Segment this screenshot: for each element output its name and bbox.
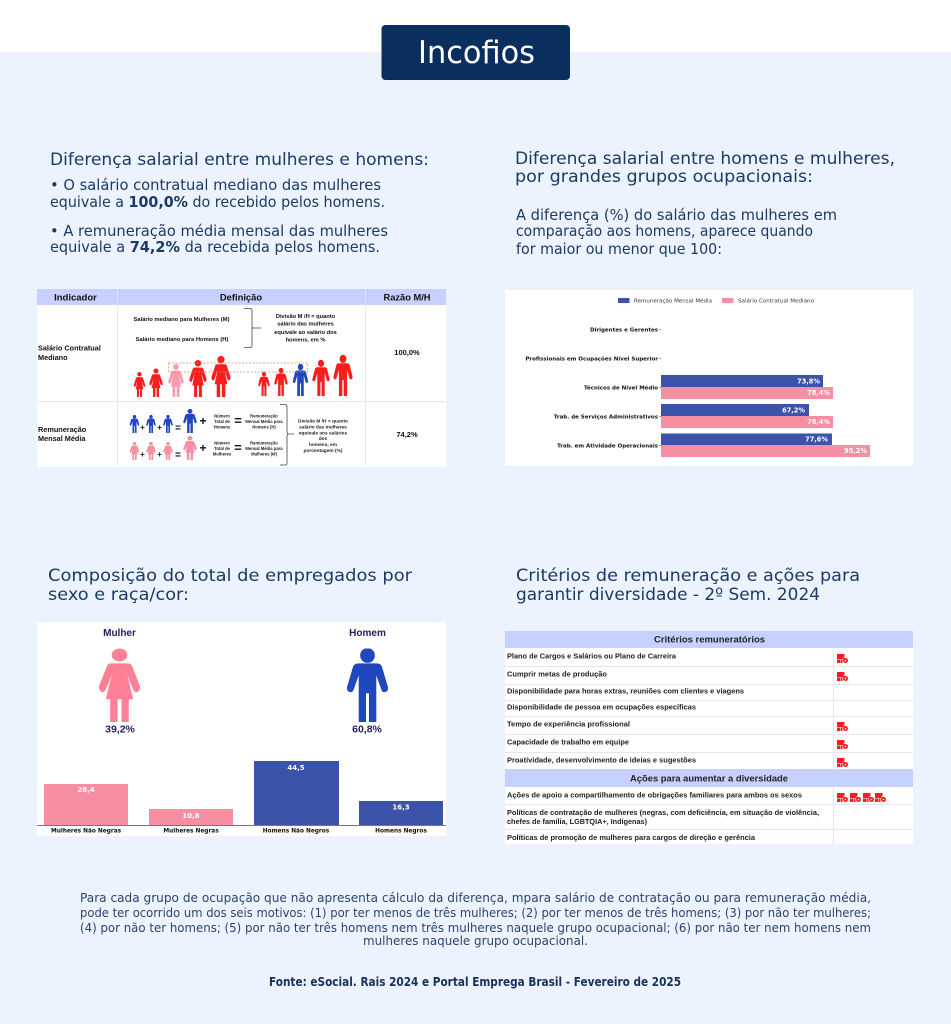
panel: employee composition xyxy=(37,622,446,836)
panel: indicator definition table: = xyxy=(234,413,242,428)
text block: salary difference summary xyxy=(50,150,429,256)
panel: bar chart by occupational group: Profissionais em Ocupações Nível Superior xyxy=(525,356,658,362)
panel: indicator definition table: Mulheres xyxy=(213,452,232,456)
panel: criteria table xyxy=(505,631,913,844)
panel: indicator definition table: Indicador xyxy=(54,292,97,304)
panel: criteria table: Cumprir metas de produção xyxy=(507,670,607,678)
panel: bar chart by occupational group: 73,8% xyxy=(797,378,820,386)
panel: indicator definition table: Mensal Média para xyxy=(245,446,283,451)
bar chart: race and sex: 28,4 xyxy=(77,786,95,794)
title badge xyxy=(382,25,570,80)
panel: indicator definition table: Razão M/H xyxy=(383,292,431,302)
text block: occupational groups heading: for maior ou menor que 100: xyxy=(516,240,722,258)
panel: bar chart by occupational group: 77,6% xyxy=(805,436,828,444)
text block: salary difference summary: equivale a 74,2% da recebida pelos homens. xyxy=(50,238,380,256)
panel: bar chart by occupational group: 78,4% xyxy=(807,389,830,397)
panel: indicator definition table: = xyxy=(175,423,181,434)
panel: indicator definition table: = xyxy=(234,440,242,455)
panel: indicator definition table: + xyxy=(157,450,162,459)
footnote: (4) por não ter homens; (5) por não ter três homens nem três mulheres naquele grupo ocupacional; (6) por não ter nem homens nem xyxy=(80,921,871,935)
panel: indicator definition table: Mensal Média xyxy=(38,434,86,443)
panel: indicator definition table: Remuneração xyxy=(250,414,278,418)
panel: criteria table: Proatividade, desenvolvimento de ideias e sugestões xyxy=(507,756,696,764)
chart legend xyxy=(618,298,815,304)
heading: composition by sex and race: sexo e raça/cor: xyxy=(48,585,189,605)
heading: composition by sex and race xyxy=(48,566,412,605)
panel: indicator definition table xyxy=(37,289,446,467)
panel: indicator definition table: Remuneração xyxy=(250,440,278,446)
panel: indicator definition table: Remuneração xyxy=(38,425,87,434)
footnote: Para cada grupo de ocupação que não apresenta cálculo da diferença, mpara salário de contratação ou para remuneração média, xyxy=(80,891,871,905)
panel: indicator definition table: Divisão M /H = quanto xyxy=(276,314,336,320)
panel: bar chart by occupational group: 78,4% xyxy=(807,418,830,426)
icons: men row xyxy=(258,355,353,396)
panel: indicator definition table: = xyxy=(175,450,181,461)
panel: bar chart by occupational group: Trab. de Serviços Administrativos xyxy=(554,414,659,420)
panel: indicator definition table: porcentagem (%) xyxy=(304,448,343,454)
panel: indicator definition table: salário das mulheres xyxy=(299,424,347,430)
panel: indicator definition table: Homens (H) xyxy=(252,424,276,430)
panel: indicator definition table: Definição xyxy=(220,292,262,302)
panel: employee composition: Homem xyxy=(349,628,386,639)
panel: bar chart by occupational group: 95,2% xyxy=(844,447,867,455)
icons: red markers xyxy=(837,654,886,802)
footnote: pode ter ocorrido um dos seis motivos: (1) por ter menos de três mulheres; (2) por ter menos de três homens; (3) por não ter mulheres; xyxy=(80,906,871,920)
panel: indicator definition table: + xyxy=(199,414,207,428)
panel: criteria table: Ações de apoio a compartilhamento de obrigações familiares para ambos os sexos xyxy=(507,790,802,800)
panel: criteria table: Capacidade de trabalho em equipe xyxy=(507,738,629,746)
text block: salary difference summary: Diferença salarial entre mulheres e homens: xyxy=(50,150,429,170)
panel: indicator definition table: Total de xyxy=(214,419,231,424)
panel: indicator definition table: + xyxy=(157,423,162,432)
text block: occupational groups heading: A diferença (%) do salário das mulheres em xyxy=(516,206,837,224)
panel: indicator definition table: Mulheres (M) xyxy=(251,452,278,456)
text block: occupational groups heading: comparação aos homens, aparece quando xyxy=(516,222,813,240)
panel: bar chart by occupational group: Trab. em Atividade Operacionais xyxy=(557,444,659,450)
bar chart: race and sex: Mulheres Negras xyxy=(163,828,219,834)
panel: indicator definition table: Salário Contratual xyxy=(38,344,101,352)
text block: salary difference summary: • A remuneração média mensal das mulheres xyxy=(50,222,388,240)
heading: pay criteria and diversity actions: garantir diversidade - 2º Sem. 2024 xyxy=(516,585,820,605)
panel: indicator definition table: Mensal Média para xyxy=(245,419,283,424)
heading: pay criteria and diversity actions xyxy=(516,566,860,605)
text block: salary difference summary: equivale a 100,0% do recebido pelos homens. xyxy=(50,193,385,211)
panel: indicator definition table: equivale ao salário dos xyxy=(274,330,337,336)
bar chart: race and sex: 16,3 xyxy=(392,804,410,812)
panel: bar chart by occupational group: Dirigentes e Gerentes xyxy=(590,328,659,334)
panel: indicator definition table: Mediano xyxy=(38,353,68,362)
panel: indicator definition table: homens, em % xyxy=(286,338,325,344)
panel: indicator definition table: Salário mediano para Homens (H) xyxy=(136,337,228,343)
panel: indicator definition table: Número xyxy=(214,440,230,446)
bar chart: race and sex: 44,5 xyxy=(287,764,305,772)
panel: criteria table: Tempo de experiência profissional xyxy=(507,720,630,728)
icon: woman xyxy=(99,648,140,722)
footnote xyxy=(80,891,871,948)
panel: indicator definition table: homens, em xyxy=(309,442,337,448)
panel: criteria table: Critérios remuneratórios xyxy=(654,634,765,644)
icon: man xyxy=(347,648,388,722)
panel: indicator definition table: 100,0% xyxy=(394,348,420,357)
bar chart: race and sex: Mulheres Não Negras xyxy=(51,828,122,834)
panel: employee composition: 60,8% xyxy=(352,724,383,736)
panel: indicator definition table: + xyxy=(140,423,145,432)
panel: bar chart by occupational group xyxy=(505,290,913,466)
bar chart: race and sex: Homens Não Negros xyxy=(263,828,330,834)
bar chart: race and sex xyxy=(37,761,446,834)
panel: employee composition: 39,2% xyxy=(105,724,136,736)
text block: occupational groups heading: por grandes grupos ocupacionais: xyxy=(515,167,813,187)
text block: occupational groups heading: Diferença salarial entre homens e mulheres, xyxy=(515,149,895,169)
footnote: mulheres naquele grupo ocupacional. xyxy=(363,934,588,948)
panel: employee composition: Mulher xyxy=(103,628,136,639)
panel: indicator definition table: + xyxy=(199,441,207,455)
heading: pay criteria and diversity actions: Critérios de remuneração e ações para xyxy=(516,566,860,586)
panel: bar chart by occupational group: 67,2% xyxy=(782,406,805,414)
panel: criteria table: Políticas de promoção de mulheres para cargos de direção e gerência xyxy=(507,833,756,842)
panel: criteria table: Políticas de contratação de mulheres (negras, com deficiência, em situação de violência, xyxy=(507,808,819,817)
panel: indicator definition table: equivale aos salários xyxy=(299,430,347,436)
icons: women row xyxy=(134,356,231,397)
panel: indicator definition table: Total de xyxy=(214,446,231,451)
chart legend: Remuneração Mensal Média xyxy=(634,298,712,304)
panel: criteria table: chefes de família, LGBTQIA+, Indígenas) xyxy=(507,817,648,826)
panel: criteria table: Disponibilidade para horas extras, reuniões com clientes e viagens xyxy=(507,686,744,696)
panel: indicator definition table: Salário mediano para Mulheres (M) xyxy=(134,317,230,323)
panel: indicator definition table: Divisão M /H = quanto xyxy=(298,418,348,424)
panel: indicator definition table: Número xyxy=(214,414,230,418)
panel: bar chart by occupational group: Técnicos de Nível Médio xyxy=(584,384,658,392)
panel: indicator definition table: Homens xyxy=(214,424,231,430)
bar chart: race and sex: Homens Negros xyxy=(375,828,427,834)
panel: criteria table: Plano de Cargos e Salários ou Plano de Carreira xyxy=(507,652,677,660)
source line: Fonte: eSocial. Rais 2024 e Portal Emprega Brasil - Fevereiro de 2025 xyxy=(269,974,681,989)
panel: indicator definition table: dos xyxy=(319,436,328,442)
heading: composition by sex and race: Composição do total de empregados por xyxy=(48,566,412,586)
bar chart: race and sex: 10,8 xyxy=(182,812,200,820)
panel: criteria table: Ações para aumentar a diversidade xyxy=(630,774,788,784)
text block: salary difference summary: • O salário contratual mediano das mulheres xyxy=(50,176,381,194)
panel: indicator definition table: + xyxy=(140,450,145,459)
title badge: Incofios xyxy=(418,35,535,71)
chart legend: Salário Contratual Mediano xyxy=(738,298,815,304)
panel: indicator definition table: 74,2% xyxy=(396,430,418,439)
panel: indicator definition table: salário das mulheres xyxy=(277,322,334,328)
text block: occupational groups heading xyxy=(515,149,895,258)
panel: criteria table: Disponibilidade de pessoa em ocupações específicas xyxy=(507,702,696,712)
